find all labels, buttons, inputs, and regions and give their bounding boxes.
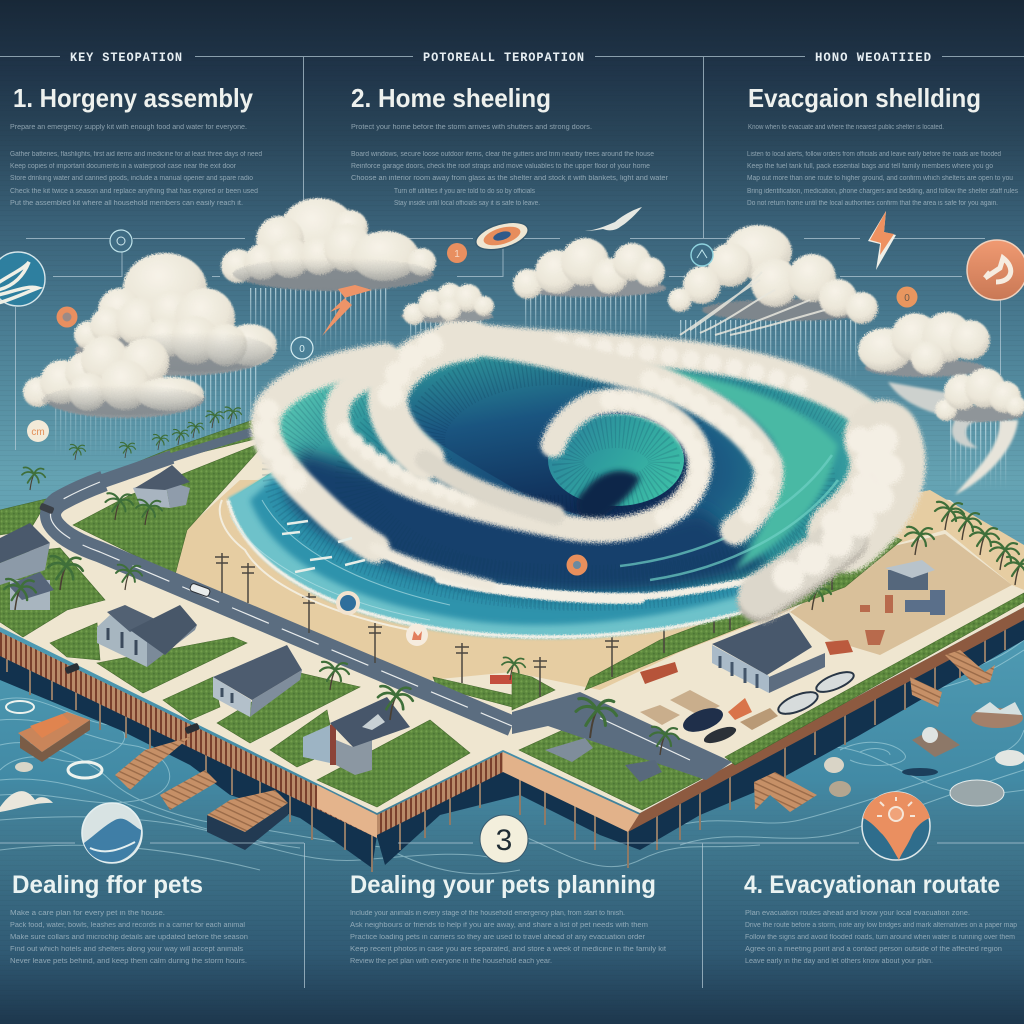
dock: right centre [754, 772, 817, 812]
panel: coastal land platform [0, 407, 1024, 872]
icon: orange dot left [56, 306, 78, 328]
utility poles [215, 550, 839, 697]
text block: pets: Pack food, water, bowls, leashes and records in a carrier for each animal [10, 922, 245, 929]
text block: planning: Ask neighbours or friends to help if you are away, and share a list of pet needs with them [350, 922, 648, 929]
heading 2: 2. Home sheeling [351, 83, 551, 113]
text block: column 2: Protect your home before the storm arrives with shutters and strong doors. [351, 124, 592, 131]
dock: stairs [115, 737, 190, 790]
icon: number three: 3 [496, 824, 512, 857]
panel: top information band [0, 50, 1024, 238]
wind streaks [680, 272, 825, 335]
icon: ring badge left [110, 230, 132, 252]
text block: column 1: Prepare an emergency supply kit with enough food and water for everyone. [10, 124, 247, 131]
text block: column 1: Check the kit twice a season and replace anything that has expired or been used [10, 188, 258, 195]
heading: pet planning: Dealing your pets planning [350, 871, 656, 899]
sand beach [175, 480, 1024, 690]
icon: blue marker on shore [336, 591, 360, 615]
text block: routes: Drive the route before a storm, note any low bridges and mark alternatives on a paper map [745, 922, 1017, 929]
small huts on lower plot [545, 738, 662, 782]
ring: outer left [265, 358, 490, 586]
cloud: left upper [74, 253, 277, 376]
cloud: small centre [401, 283, 494, 325]
icon: ring badge under cloud: 0 [299, 344, 305, 355]
curl ribs [568, 432, 664, 492]
icon: left circular badge [0, 252, 45, 306]
rib texture [285, 352, 885, 590]
dock: lower [207, 790, 288, 850]
house: top road [133, 465, 190, 508]
text block: column 3 [747, 124, 1018, 207]
swirl eye [576, 471, 640, 525]
heading 1: 1. Horgeny assembly [13, 83, 253, 113]
text block: pets: Make a care plan for every pet in the house. [10, 910, 165, 917]
icon: cream badge [27, 420, 49, 442]
text block: column 2: Turn off utilities if you are told to do so by officials [394, 188, 535, 195]
icon: ring badge under cloud [291, 337, 313, 359]
clouds: left pair [23, 253, 277, 418]
inner basin ribs [425, 365, 685, 515]
icon: orange dot right [896, 286, 918, 308]
cloud: right upper [858, 312, 990, 377]
cloud: top centre [221, 198, 436, 291]
text block: pets [10, 910, 248, 965]
icon: cream badge: cm [31, 427, 45, 438]
deck pillars [7, 625, 1005, 872]
icon: big orange badge [967, 240, 1024, 300]
text block: routes: Agree on a meeting point and a contact person outside of the affected region [745, 946, 1002, 953]
dock: right plank [910, 677, 942, 707]
text block: planning: Include your animals in every stage of the household emergency plan, from start to finish. [350, 910, 625, 917]
text block: planning [350, 910, 666, 965]
house: right main [712, 613, 825, 693]
ring: top hump into centre [388, 340, 769, 530]
icon: number three [480, 815, 528, 863]
icon: orange marker in swirl [566, 554, 588, 576]
inner basin [400, 357, 705, 523]
dark water under decks [0, 615, 1024, 868]
house: top left [0, 523, 54, 610]
text block: column 3: Map out more than one route to higher ground, and confirm which shelters are open to you [747, 175, 1013, 182]
icon: wave badge [82, 803, 142, 863]
teal streaks lower right [620, 455, 838, 580]
house: damaged [303, 697, 410, 775]
land surface [0, 425, 1024, 813]
cars on road [39, 503, 512, 734]
icon: orange dot right: 0 [904, 293, 910, 304]
bottom sea [0, 630, 1024, 880]
dock: middle [160, 770, 217, 810]
label: home weather: HONO WEOATIIED [815, 50, 932, 65]
text block: column 1: Gather batteries, flashlights, first aid items and medicine for at least three days of need [10, 151, 262, 158]
text block: column 3: Do not return home until the local authorities confirm that the area is safe for you again. [747, 200, 998, 207]
text block: routes: Plan evacuation routes ahead and know your local evacuation zone. [745, 910, 970, 917]
text block: planning: Practice loading pets in carriers so they are used to travel ahead of any evacuation order [350, 934, 646, 941]
text block: column 2: Reinforce garage doors, check the roof straps and move valuables to the upper floor of your home [351, 163, 650, 170]
surfboards debris [282, 521, 365, 572]
text block: routes: Follow the signs and avoid flooded roads, turn around when water is running over them [745, 934, 1015, 941]
cloud: top middle right [513, 238, 666, 299]
label: key steps: KEY STEOPATION [70, 50, 183, 65]
icon: lightning bolt [868, 211, 896, 270]
floating docks [18, 650, 995, 850]
heading: pets: Dealing ffor pets [12, 871, 203, 899]
text block: pets: Find out which hotels and shelters along your way will accept animals [10, 946, 244, 953]
sea wave lines [0, 640, 1024, 874]
text block: planning: Keep recent photos in case you are separated, and store a week of medicine in the family kit [350, 946, 666, 953]
text block: planning: Review the pet plan with everyone in the household each year. [350, 958, 552, 965]
supplies on pad [640, 590, 945, 746]
text block: column 3: Know when to evacuate and where the nearest public shelter is located. [748, 124, 944, 131]
icon: striped disc [473, 217, 531, 255]
ring: outer right [450, 336, 888, 600]
icon: orange number one: 1 [454, 249, 460, 260]
icon: ring badge right [691, 244, 713, 266]
deck facades [0, 607, 1024, 838]
text block: column 2: Choose an interior room away from glass as the shelter and stock it with blankets, light and water [351, 175, 669, 182]
green plots [0, 420, 1024, 810]
icon: orange number one [447, 243, 467, 263]
text block: column 1: Keep copies of important documents in a waterproof case near the exit door [10, 163, 237, 170]
icon: lightning under top cloud [322, 285, 372, 336]
cloud: right lower with funnel [888, 368, 1024, 495]
text block: column 1 [10, 124, 262, 207]
foam band lower [340, 530, 775, 599]
connector lines [16, 238, 1000, 450]
dock: left orange [18, 712, 90, 762]
text block: pets: Make sure collars and microchip details are updated before the season [10, 934, 248, 941]
panel: bottom information band [0, 792, 1024, 988]
house: middle [213, 645, 302, 717]
text block: pets: Never leave pets behind, and keep them calm during the storm hours. [10, 958, 247, 965]
icon: sun badge [862, 792, 930, 860]
palm trees [4, 407, 1024, 755]
shelter [885, 560, 935, 590]
dock: right far [945, 650, 995, 685]
debris in water [0, 701, 1024, 812]
icon: bird [585, 207, 642, 231]
text block: column 3: Keep the fuel tank full, pack essential bags and tell family members where you go [747, 163, 993, 170]
foam sand edge [220, 500, 420, 632]
cloud: top right with wind streaks [668, 225, 878, 324]
ring: second left to curl [337, 372, 700, 530]
text block: routes [745, 910, 1017, 965]
rain columns [55, 288, 1010, 490]
text block: column 2 [351, 124, 669, 207]
text block: column 2: Board windows, secure loose outdoor items, clear the gutters and trim nearby trees around the house [351, 151, 654, 158]
mint crescent [640, 365, 838, 570]
panel: giant swirl wave [220, 336, 916, 646]
house: left large [97, 605, 197, 667]
road [50, 432, 732, 780]
icon: cream marker on beach [406, 624, 428, 646]
text block: column 2: Stay inside until local officials say it is safe to leave. [394, 200, 540, 207]
shore water [228, 450, 800, 639]
label: potential: POTOREALL TEROPATION [423, 50, 585, 65]
heading 3: Evacgaion shellding [748, 83, 981, 113]
text block: column 1: Put the assembled kit where all household members can easily reach it. [10, 200, 243, 207]
curl interior [548, 414, 684, 506]
outer water body [228, 336, 916, 635]
text block: routes: Leave early in the day and let others know about your plan. [745, 958, 933, 965]
text block: column 1: Store drinking water and canned goods, include a manual opener and spare radio [10, 175, 253, 182]
heading: evacuation route: 4. Evacyationan routate [744, 871, 1000, 899]
